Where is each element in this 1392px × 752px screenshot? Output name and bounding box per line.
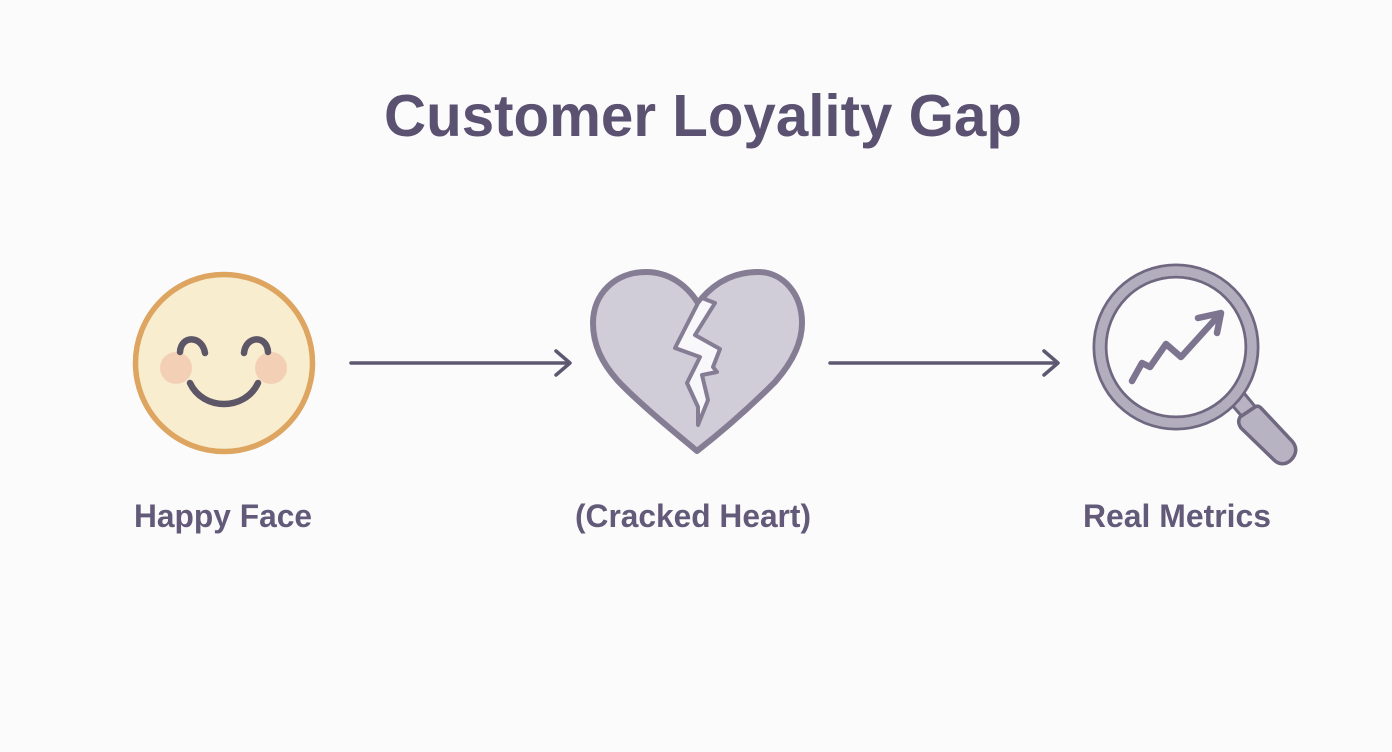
trend arrowhead: [1198, 313, 1221, 333]
label: cracked heart: (Cracked Heart): [575, 498, 811, 534]
magnifier lens ring: [1100, 271, 1252, 423]
rising trend line: [1132, 314, 1220, 381]
label: real metrics: Real Metrics: [1083, 498, 1271, 534]
arrow: face to heart: [351, 351, 570, 375]
icon: cracked heart: [593, 272, 802, 451]
magnifier neck: [1231, 393, 1258, 420]
magnifier handle: [1239, 406, 1296, 464]
title: Customer Loyality Gap: [384, 83, 1022, 149]
icon: happy face: [136, 274, 312, 452]
icon: magnifying glass with rising chart: [1100, 271, 1296, 464]
label: happy face: Happy Face: [134, 498, 312, 534]
arrow: heart to metrics: [830, 351, 1058, 375]
